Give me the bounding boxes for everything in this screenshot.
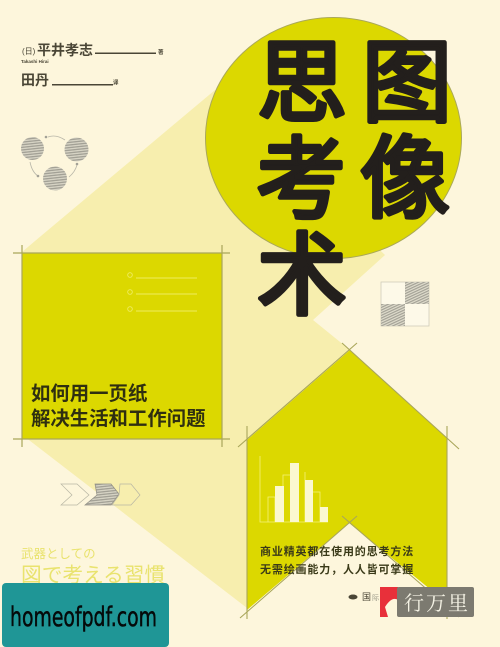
watermark: stamp: 行万里	[404, 587, 470, 616]
watermark: homeofpdf: homeofpdf.com	[10, 602, 157, 633]
author credits: 著	[158, 48, 164, 56]
pale yellow projected band	[22, 90, 385, 608]
publisher mark	[348, 592, 379, 602]
author credits: 田丹	[21, 72, 49, 88]
Japanese original title: 武器としての	[21, 547, 96, 561]
panel: yellow arrow	[238, 343, 459, 619]
arrow caption	[260, 544, 414, 576]
Japanese original title: 図で考える習慣	[21, 564, 165, 587]
checklist icon	[128, 273, 197, 311]
subtitle: 解决生活和工作问题	[31, 408, 206, 430]
bar chart icon	[260, 456, 328, 522]
author credits: 平井孝志	[37, 42, 93, 58]
yellow circle	[206, 18, 462, 258]
author credits: (日)	[22, 47, 36, 56]
book title	[256, 34, 452, 327]
panel: yellow square	[13, 245, 230, 447]
arrow caption: 无需绘画能力，人人皆可掌握	[260, 562, 414, 576]
icon: three hatched circles cycle	[21, 136, 88, 190]
book title: 像	[360, 130, 450, 230]
arrow caption: 商业精英都在使用的思考方法	[260, 544, 414, 558]
author credits: 译	[113, 78, 119, 86]
publisher mark: 际	[372, 593, 379, 602]
watermark: stamp	[380, 587, 474, 617]
subtitle: 如何用一页纸	[31, 382, 147, 405]
book title: 术	[257, 227, 347, 327]
book title: 图	[362, 34, 452, 134]
icon: chevron row	[61, 484, 140, 505]
Japanese original title	[21, 547, 165, 587]
author credits: Takashi Hirai	[21, 59, 49, 64]
author credits	[21, 42, 164, 88]
subtitle	[31, 382, 206, 430]
book title: 思	[257, 34, 347, 134]
book title: 考	[256, 131, 346, 231]
watermark: homeofpdf	[2, 583, 169, 647]
icon: checker square	[381, 282, 429, 326]
publisher mark: 国	[362, 592, 371, 602]
